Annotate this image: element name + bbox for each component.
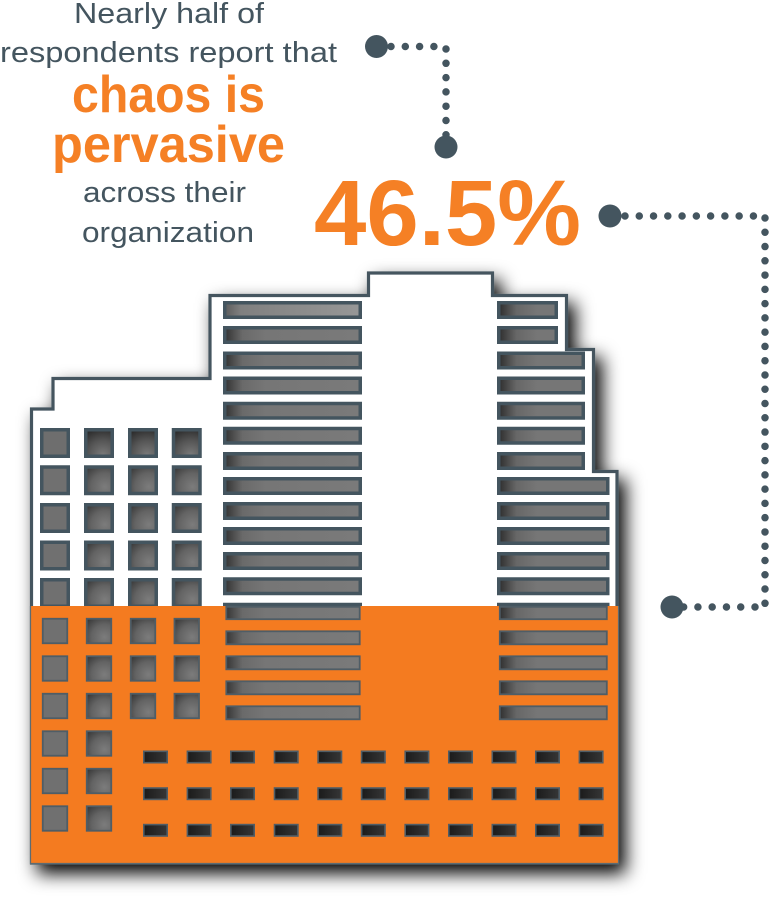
windows: orange zone square windows (43, 619, 199, 831)
closing line 2: organization (82, 217, 254, 249)
highlight: chaos is: chaos is (72, 66, 265, 124)
windows: right wing bars (499, 303, 608, 619)
connector: statistic to orange fill level (598, 204, 765, 618)
windows: lower block small dark windows (144, 751, 603, 836)
intro line 2: respondents report that (0, 37, 337, 69)
windows: orange zone right bars (500, 607, 607, 719)
statistic: 46.5%: 46.5% (314, 161, 581, 265)
building illustration (30, 273, 618, 864)
windows: centre tower left bars (225, 303, 360, 619)
windows: left block square windows (42, 430, 200, 606)
orange fill: 46.5% level (30, 606, 618, 864)
windows: orange zone centre bars (226, 607, 360, 719)
connector: text to statistic (365, 35, 458, 158)
highlight: pervasive: pervasive (52, 116, 285, 174)
closing line 1: across their (83, 177, 246, 209)
text block: nearly half of respondents (0, 0, 337, 249)
building outline (32, 273, 617, 863)
orange fill edge (30, 606, 618, 864)
